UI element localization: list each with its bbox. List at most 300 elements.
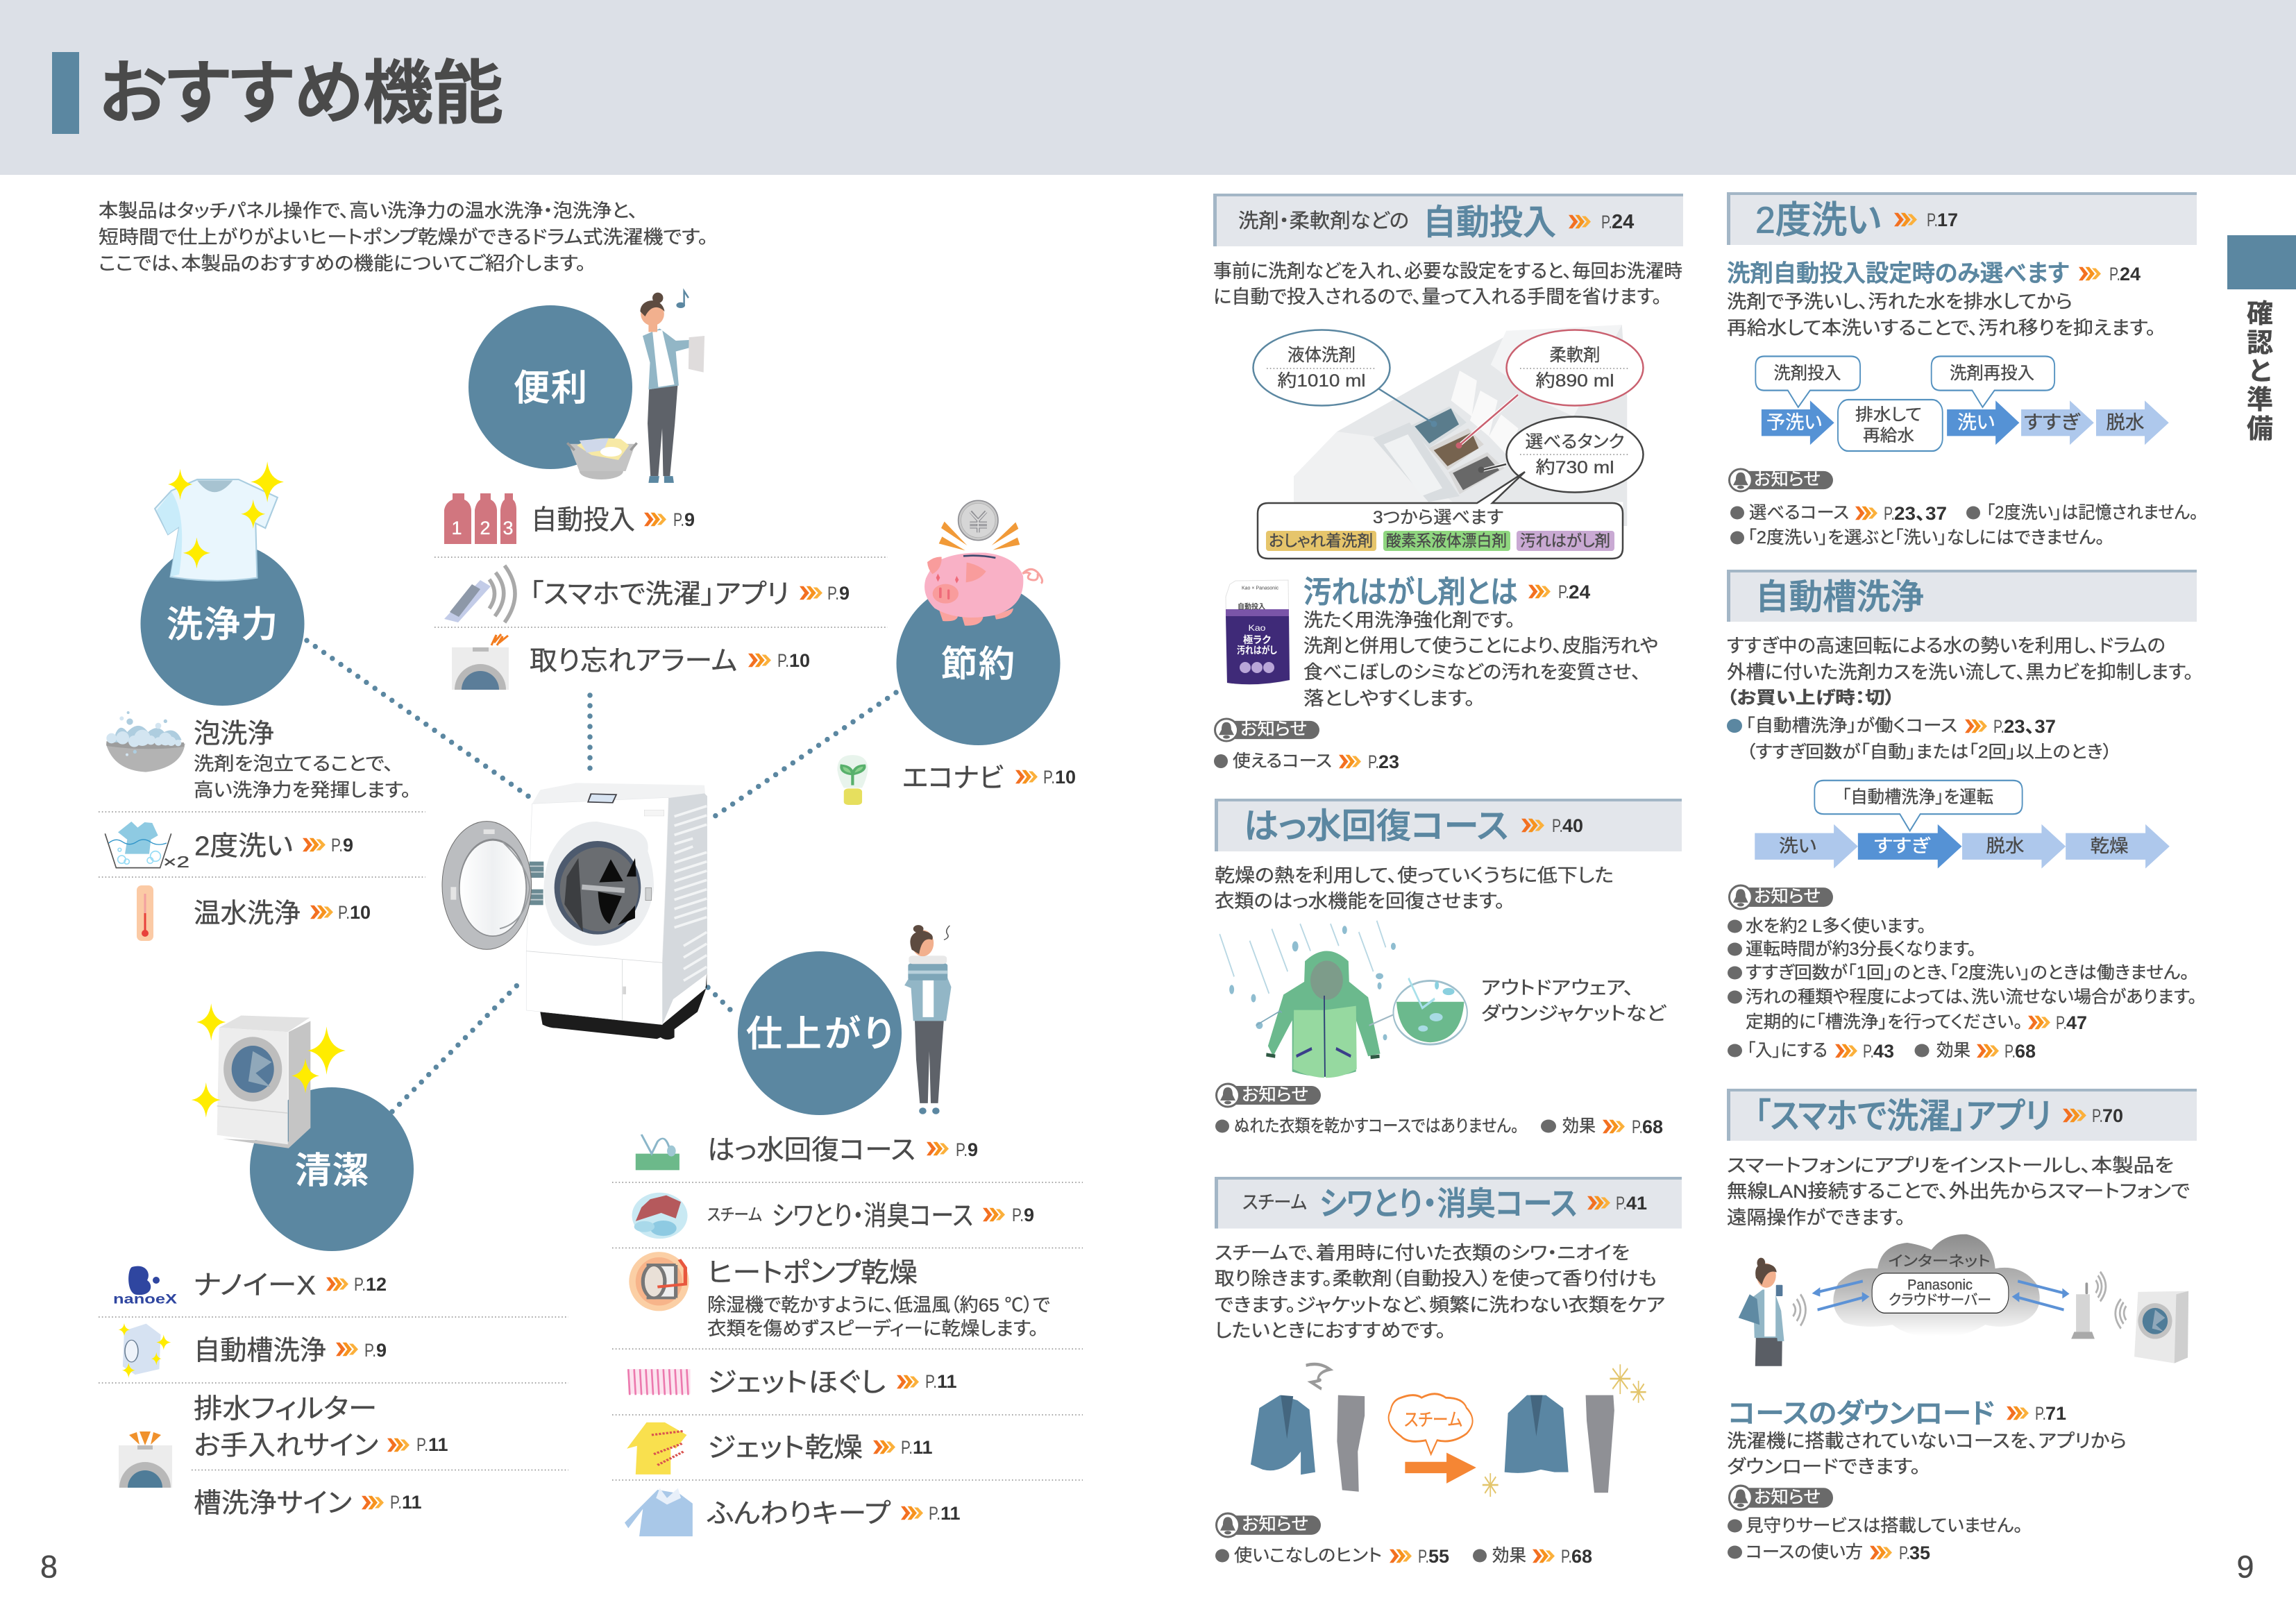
body text: スチームで、着用時に付いた衣類のシワ・ニオイを — [1215, 1243, 1630, 1264]
subheading: P. — [2109, 264, 2120, 284]
drain filter item: お手入れサイン — [194, 1431, 378, 1461]
body text: 衣類のはっ水機能を回復させます。 — [1215, 891, 1505, 912]
notice badge: お知らせ — [1242, 1515, 1308, 1534]
body text: 取り除きます。柔軟剤（自動投入）を使って香り付けも — [1215, 1268, 1657, 1289]
notice items: 68 — [2015, 1041, 2036, 1062]
subheading: 24 — [2120, 264, 2141, 284]
notice items: 見守りサービスは搭載していません。 — [1746, 1516, 2023, 1536]
what is soil remover: P. — [1558, 581, 1569, 602]
section header — [1213, 194, 1683, 246]
course note — [1727, 716, 2112, 762]
notice badge: お知らせ — [1754, 1488, 1821, 1507]
box: choose from three: 汚れはがし剤 — [1520, 532, 1610, 550]
feature: auto dosing: P. — [673, 509, 684, 530]
subheading: 洗剤自動投入設定時のみ選べます — [1727, 261, 2069, 287]
water repellency item: P. — [956, 1139, 968, 1160]
what is soil remover: 落としやすくします。 — [1303, 688, 1475, 709]
notice badge: お知らせ — [1754, 887, 1821, 906]
body text: （お買い上げ時：切） — [1727, 688, 1895, 708]
notice items: 使いこなしのヒント — [1234, 1546, 1382, 1565]
feature: auto dosing: 自動投入 — [531, 505, 635, 536]
icon: yellow shirt with air — [627, 1422, 686, 1475]
intro text: 短時間で仕上がりがよいヒートポンプ乾燥ができるドラム式洗濯機です。 — [99, 227, 708, 248]
section: smartphone app — [1727, 1089, 2197, 1563]
header band — [0, 0, 2296, 175]
jet loosen item: P. — [925, 1371, 937, 1392]
feature: foam wash: 泡洗浄 — [194, 719, 274, 749]
diagram: network: クラウドサーバー — [1889, 1292, 1991, 1309]
water repellency item: はっ水回復コース — [707, 1135, 915, 1166]
notice items: 55 — [1428, 1546, 1449, 1567]
callout: softener: 約890 ml — [1535, 371, 1614, 391]
jacket after — [1505, 1395, 1569, 1473]
product package: 汚れはがし — [1237, 645, 1277, 656]
circle: finish: 仕上がり — [746, 1014, 893, 1055]
circle: saving — [897, 581, 1061, 745]
jet dry item — [627, 1422, 933, 1475]
side label: 準 — [2247, 386, 2273, 415]
feature: foam wash: 洗剤を泡立てることで、 — [194, 754, 394, 774]
notice items: 47 — [2066, 1012, 2087, 1033]
soft keep item — [625, 1488, 961, 1536]
nanoeX item: P. — [354, 1274, 366, 1295]
icon: heat pump drum — [629, 1252, 689, 1311]
box: choose from three: 酸素系液体漂白剤 — [1386, 532, 1507, 550]
notice items: P. — [1418, 1546, 1429, 1567]
drain filter item: P. — [416, 1434, 428, 1455]
course download heading: P. — [2035, 1403, 2046, 1424]
intro text: 本製品はタッチパネル操作で、高い洗浄力の温水洗浄・泡洗浄と、 — [99, 201, 638, 221]
soft keep item: P. — [929, 1503, 940, 1524]
feature: auto dosing: 3 — [503, 518, 514, 538]
callout lines — [1378, 389, 1518, 473]
flow diagram: double wash: 予洗い — [1766, 412, 1822, 433]
jet dry item: ジェット乾燥 — [707, 1434, 863, 1463]
body text: 事前に洗剤などを入れ、必要な設定をすると、毎回お洗濯時 — [1213, 261, 1682, 282]
section: auto tub cleaning — [1727, 570, 2197, 1062]
icon: tub with foam — [106, 711, 185, 772]
arrows — [1818, 1281, 2063, 1310]
tub clean sign item: 11 — [402, 1492, 422, 1513]
flow diagram: double wash: 洗い — [1957, 412, 1995, 433]
course note: P. — [1993, 716, 2004, 737]
callout: selectable tank: 約730 ml — [1535, 458, 1614, 477]
icon: shirt in water x2 — [105, 822, 171, 868]
trousers after — [1586, 1395, 1614, 1493]
notice items: 効果 — [1492, 1546, 1526, 1565]
feature: warm water wash: 温水洗浄 — [194, 899, 301, 928]
steam bubble text: スチーム — [1404, 1409, 1462, 1430]
body text: したいときにおすすめです。 — [1215, 1320, 1446, 1341]
icon: washer with alert marks — [119, 1431, 172, 1488]
callout: liquid detergent: 液体洗剤 — [1288, 346, 1356, 365]
course note: 「自動槽洗浄」が働くコース — [1746, 716, 1957, 736]
body text: 再給水して本洗いすることで、汚れ移りを抑えます。 — [1727, 318, 2156, 339]
flow diagram: double wash: すすぎ — [2024, 412, 2081, 433]
feature: econavi: P. — [1043, 767, 1055, 788]
tub clean sign item: 槽洗浄サイン — [194, 1489, 352, 1518]
box: choose from three — [1258, 472, 1623, 559]
side label — [2247, 300, 2273, 444]
drain filter item — [119, 1395, 448, 1488]
section header: 70 — [2102, 1105, 2123, 1126]
notice items: 効果 — [1562, 1116, 1596, 1136]
notice item: 使えるコース — [1233, 751, 1332, 771]
section header: 「スマホで洗濯」アプリ — [1755, 1096, 2051, 1135]
auto tub cleaning item: 9 — [376, 1340, 387, 1361]
box: choose from three: 3つから選べます — [1373, 508, 1503, 527]
callout: selectable tank: 選べるタンク — [1526, 432, 1624, 452]
notice items: P. — [1884, 503, 1895, 524]
jacket caption: アウトドアウェア、 — [1481, 978, 1634, 999]
section header: P. — [1601, 212, 1612, 232]
notice items — [1215, 1116, 1663, 1137]
feature list: finish — [612, 1135, 1083, 1536]
body text: 乾燥の熱を利用して、使っていくうちに低下した — [1215, 865, 1614, 886]
icon: pink garments — [628, 1369, 691, 1395]
icon: clean tub — [119, 1323, 171, 1378]
notice items: 水を約2 L多く使います。 — [1746, 917, 1926, 936]
section header: 24 — [1612, 211, 1634, 233]
page number 8: 8 — [40, 1549, 58, 1585]
section header: P. — [1552, 815, 1563, 836]
circle: cleaning power — [140, 542, 304, 706]
notice item: 23 — [1378, 751, 1399, 772]
feature: econavi — [837, 755, 1076, 805]
notice items: P. — [1632, 1116, 1643, 1137]
section: water repellency — [1215, 799, 1682, 1137]
auto tub cleaning item: 自動槽洗浄 — [194, 1336, 326, 1366]
flow diagram: double wash: 洗剤再投入 — [1950, 364, 2034, 383]
nanoeX item — [113, 1266, 387, 1307]
feature: auto dosing: 2 — [480, 518, 491, 538]
what is soil remover: 汚れはがし剤とは — [1303, 575, 1518, 609]
jet dry item: P. — [901, 1437, 913, 1458]
water repellency item — [636, 1135, 978, 1170]
washing machine photo — [442, 783, 707, 1039]
icon: detergent bottles — [444, 493, 516, 544]
section header — [1215, 799, 1682, 851]
notice items: 「入」にする — [1747, 1041, 1827, 1060]
steam wrinkle item: P. — [1012, 1205, 1024, 1225]
callout: selectable tank — [1506, 416, 1644, 493]
circle: convenience — [469, 305, 632, 469]
product package: 極ラク — [1243, 634, 1271, 645]
jacket caption — [1481, 978, 1667, 1024]
section header: はっ水回復コース — [1244, 806, 1508, 845]
washer — [2134, 1291, 2188, 1363]
diagram: network: インターネット — [1888, 1253, 1991, 1270]
body text: 外槽に付いた洗剤カスを洗い流して、黒カビを抑制します。 — [1727, 662, 2193, 683]
feature: auto dosing — [444, 493, 695, 544]
what is soil remover: 24 — [1569, 581, 1591, 602]
body text: 遠隔操作ができます。 — [1727, 1207, 1905, 1228]
notice items: 汚れの種類や程度によっては、洗い流せない場合があります。 — [1746, 987, 2197, 1007]
notice items: P. — [2056, 1012, 2067, 1033]
notice items: 運転時間が約3分長くなります。 — [1746, 940, 1976, 959]
circle: cleanliness — [250, 1087, 414, 1251]
box: choose from three: おしゃれ着洗剤 — [1269, 532, 1373, 550]
notice items — [1215, 1546, 1592, 1567]
feature: foam wash: 高い洗浄力を発揮します。 — [194, 780, 411, 801]
feature: smartphone app — [444, 566, 850, 622]
section header — [1727, 570, 2197, 622]
product package: Kao — [1248, 623, 1266, 633]
soft keep item: ふんわりキープ — [707, 1499, 891, 1529]
feature: double wash — [105, 822, 353, 871]
feature: forgot-item alarm: 10 — [789, 650, 810, 671]
course download heading: コースのダウンロード — [1728, 1399, 1994, 1429]
feature: warm water wash: 10 — [350, 902, 371, 923]
notice items: 「2度洗い」を選ぶと「洗い」なしにはできません。 — [1748, 528, 2104, 547]
section header: シワとり・消臭コース — [1319, 1185, 1577, 1222]
body text: に自動で投入されるので、量って入れる手間を省けます。 — [1213, 287, 1662, 307]
flow diagram: tub cleaning: 乾燥 — [2091, 835, 2128, 856]
section header: 41 — [1626, 1193, 1647, 1214]
flow diagram: double wash: 排水して — [1855, 405, 1922, 425]
body text — [1215, 865, 1614, 912]
icon: steamed clothes — [632, 1193, 687, 1239]
body text — [1727, 636, 2193, 708]
section header — [1215, 1177, 1682, 1228]
body text: スマートフォンにアプリをインストールし、本製品を — [1727, 1155, 2174, 1176]
section header: 17 — [1937, 210, 1958, 230]
illustration: rain jacket — [1219, 921, 1467, 1078]
section header: 自動投入 — [1423, 203, 1556, 241]
notice items: P. — [1899, 1543, 1910, 1563]
body text: 洗剤で予洗いし、汚れた水を排水してから — [1727, 291, 2073, 312]
feature: smartphone app: P. — [827, 583, 839, 604]
body text: ダウンロードできます。 — [1727, 1456, 1921, 1477]
page number 9: 9 — [2236, 1549, 2254, 1585]
illustration: sparkling washer — [192, 1003, 346, 1148]
notice items — [1730, 503, 2198, 547]
circle: cleaning power: 洗浄力 — [167, 605, 278, 645]
heat pump drying item — [629, 1252, 1050, 1339]
product package — [1226, 580, 1290, 684]
illustration: piggy bank with coin — [925, 500, 1043, 626]
auto tub cleaning item — [119, 1323, 387, 1378]
section header: P. — [1927, 210, 1938, 230]
notice items: 定期的に「槽洗浄」を行ってください。 — [1746, 1012, 2023, 1032]
notice badge: お知らせ — [1240, 720, 1307, 739]
circle: saving: 節約 — [941, 645, 1015, 685]
section header: P. — [2092, 1105, 2103, 1126]
notice items: 「2度洗い」は記憶されません。 — [1986, 503, 2198, 522]
heat pump drying item: 衣類を傷めずスピーディーに乾燥します。 — [707, 1318, 1038, 1339]
feature: smartphone app: 9 — [839, 583, 850, 604]
notice badge — [1729, 1486, 1833, 1510]
notice badge — [1729, 469, 1833, 491]
woman with phone — [1739, 1258, 1784, 1366]
side label: 確 — [2247, 300, 2273, 329]
header accent block — [52, 52, 79, 134]
steam wrinkle item: シワとり・消臭コース — [772, 1202, 973, 1231]
arrow — [1405, 1452, 1476, 1484]
body text: できます。ジャケットなど、頻繁に洗わない衣類をケア — [1215, 1295, 1665, 1316]
icon: blue shirt — [625, 1488, 693, 1536]
notice item — [1214, 751, 1399, 772]
body text — [1215, 1243, 1665, 1341]
notice items: コースの使い方 — [1746, 1543, 1863, 1562]
flow diagram: double wash: 再給水 — [1863, 426, 1914, 445]
steam wrinkle item — [632, 1193, 1034, 1239]
notice items: P. — [1561, 1546, 1572, 1567]
intro text: ここでは、本製品のおすすめの機能についてご紹介します。 — [99, 253, 586, 274]
section header — [1727, 1089, 2197, 1141]
notice badge — [1729, 885, 1833, 909]
notice badge — [1216, 1084, 1321, 1107]
flow diagram: tub cleaning: すすぎ — [1874, 835, 1931, 856]
notice item: P. — [1368, 751, 1379, 772]
illustration: woman with laundry — [567, 291, 704, 483]
jacket before — [1251, 1395, 1315, 1475]
jet loosen item: ジェットほぐし — [707, 1368, 886, 1397]
feature: double wash: 9 — [343, 835, 353, 856]
section header: P. — [1616, 1193, 1627, 1214]
notice items — [1728, 1516, 2023, 1563]
body text — [1213, 261, 1682, 307]
drain filter item: 11 — [428, 1434, 448, 1455]
what is soil remover: 食べこぼしのシミなどの汚れを変質させ、 — [1303, 662, 1641, 683]
course note: 23、37 — [2004, 716, 2056, 737]
notice items: ぬれた衣類を乾かすコースではありません。 — [1234, 1116, 1519, 1136]
callout: liquid detergent: 約1010 ml — [1277, 371, 1366, 391]
course note: （すすぎ回数が「自動」または「2回」以上のとき） — [1746, 742, 2112, 762]
circle: cleanliness: 清潔 — [295, 1151, 369, 1191]
jet dry item: 11 — [913, 1437, 933, 1458]
notice items: 効果 — [1936, 1041, 1970, 1060]
section header: 自動槽洗浄 — [1755, 577, 1924, 616]
body text: すすぎ中の高速回転による水の勢いを利用し、ドラムの — [1727, 636, 2166, 656]
callout: softener: 柔軟剤 — [1549, 346, 1601, 365]
heat pump drying item: ヒートポンプ乾燥 — [707, 1259, 918, 1288]
title: おすすめ機能 — [99, 55, 503, 133]
diagram: network — [1739, 1234, 2188, 1366]
jet loosen item: 11 — [937, 1371, 957, 1392]
flow diagram: tub cleaning: 洗い — [1779, 835, 1816, 856]
feature: auto dosing: 9 — [684, 509, 695, 530]
callout: liquid detergent — [1253, 330, 1390, 405]
notice items: 23、37 — [1894, 503, 1947, 524]
notice badge: お知らせ — [1754, 470, 1821, 489]
notice items: 68 — [1571, 1546, 1592, 1567]
notice items: 43 — [1873, 1041, 1894, 1062]
feature: smartphone app: 「スマホで洗濯」アプリ — [530, 580, 789, 609]
section header: 洗剤・柔軟剤などの — [1238, 210, 1409, 232]
section header: 40 — [1562, 815, 1583, 836]
product package: Kao × Panasonic — [1242, 586, 1279, 591]
soft keep item: 11 — [940, 1503, 961, 1524]
notice badge — [1215, 719, 1319, 741]
side label: と — [2249, 357, 2271, 386]
circle: convenience: 便利 — [514, 368, 587, 409]
body text — [1727, 291, 2156, 339]
feature: foam wash — [106, 711, 411, 801]
body text: 洗濯機に搭載されていないコースを、アプリから — [1727, 1431, 2127, 1452]
section: auto dosing — [1213, 194, 1683, 772]
side label: 備 — [2247, 415, 2273, 444]
notice items: P. — [1863, 1041, 1874, 1062]
notice items: 35 — [1909, 1543, 1930, 1563]
drain filter item: 排水フィルター — [194, 1395, 377, 1424]
what is soil remover — [1303, 575, 1658, 709]
feature: forgot-item alarm: 取り忘れアラーム — [530, 647, 737, 676]
notice badge — [1216, 1513, 1321, 1537]
water repellency item: 9 — [968, 1139, 978, 1160]
notice items: 68 — [1642, 1116, 1663, 1137]
flow diagram: double wash: 脱水 — [2106, 412, 2145, 433]
feature: double wash: ×2 — [163, 853, 189, 871]
notice items: すすぎ回数が「1回」のとき、「2度洗い」のときは働きません。 — [1746, 963, 2189, 983]
what is soil remover: 洗たく用洗浄強化剤です。 — [1303, 610, 1515, 631]
section: steam course — [1215, 1177, 1682, 1567]
flow diagram: double wash — [1755, 356, 2169, 451]
course download heading: 71 — [2045, 1403, 2066, 1424]
heat pump drying item: 除湿機で乾かすように、低温風（約65 ℃）で — [707, 1295, 1050, 1316]
what is soil remover: 洗剤と併用して使うことにより、皮脂汚れや — [1303, 636, 1658, 656]
body text: 無線LAN接続することで、外出先からスマートフォンで — [1727, 1181, 2190, 1202]
icon: washer with alert — [452, 634, 509, 690]
nanoeX item: 12 — [366, 1274, 387, 1295]
diagram: network: Panasonic — [1907, 1277, 1973, 1293]
steam wrinkle item: スチーム — [707, 1206, 762, 1224]
tub clean sign item — [194, 1489, 422, 1518]
detergent dispenser photo — [1294, 325, 1627, 526]
feature: forgot-item alarm: P. — [777, 650, 789, 671]
nanoeX item: ナノイーX — [194, 1271, 316, 1300]
connector dots — [307, 640, 896, 1112]
intro text — [99, 201, 708, 274]
cloud — [1833, 1234, 2040, 1336]
flow diagram: tub cleaning — [1755, 781, 2170, 869]
icon: phone and waves — [444, 566, 515, 622]
body text — [1727, 1155, 2190, 1228]
feature: econavi: エコナビ — [902, 763, 1004, 794]
flow diagram: tub cleaning: 脱水 — [1986, 835, 2024, 856]
feature: econavi: 10 — [1055, 767, 1076, 788]
jet loosen item — [628, 1368, 957, 1397]
jacket caption: ダウンジャケットなど — [1481, 1003, 1667, 1024]
steam wrinkle item: 9 — [1024, 1205, 1034, 1225]
notice items: 選べるコース — [1749, 503, 1849, 522]
feature: warm water wash — [137, 885, 371, 941]
auto tub cleaning item: P. — [364, 1340, 376, 1361]
section header — [1727, 192, 2197, 245]
side label: 認 — [2247, 329, 2273, 358]
feature: auto dosing: 1 — [451, 518, 462, 538]
notice items: P. — [2004, 1041, 2016, 1062]
router — [2071, 1282, 2095, 1339]
feature: warm water wash: P. — [338, 902, 350, 923]
icon: thermometer — [137, 885, 153, 941]
feature: double wash: P. — [331, 835, 343, 856]
section: double wash — [1727, 192, 2198, 547]
icon: nanoeX logo — [113, 1266, 177, 1307]
side tab — [2227, 235, 2296, 289]
body text — [1727, 1431, 2127, 1477]
feature: double wash: 2度洗い — [194, 831, 293, 862]
notice badge: お知らせ — [1242, 1085, 1308, 1105]
section header: スチーム — [1242, 1192, 1307, 1213]
illustration: sparkling T-shirt — [155, 461, 284, 581]
flow diagram: tub cleaning: 「自動槽洗浄」を運転 — [1842, 788, 1993, 807]
callout: softener — [1506, 330, 1644, 405]
notice items — [1728, 917, 2197, 1062]
circle: finish — [738, 951, 902, 1115]
feature list: cleanliness — [99, 1266, 568, 1518]
icon: nanoeX logo: nanoeX — [113, 1292, 177, 1307]
